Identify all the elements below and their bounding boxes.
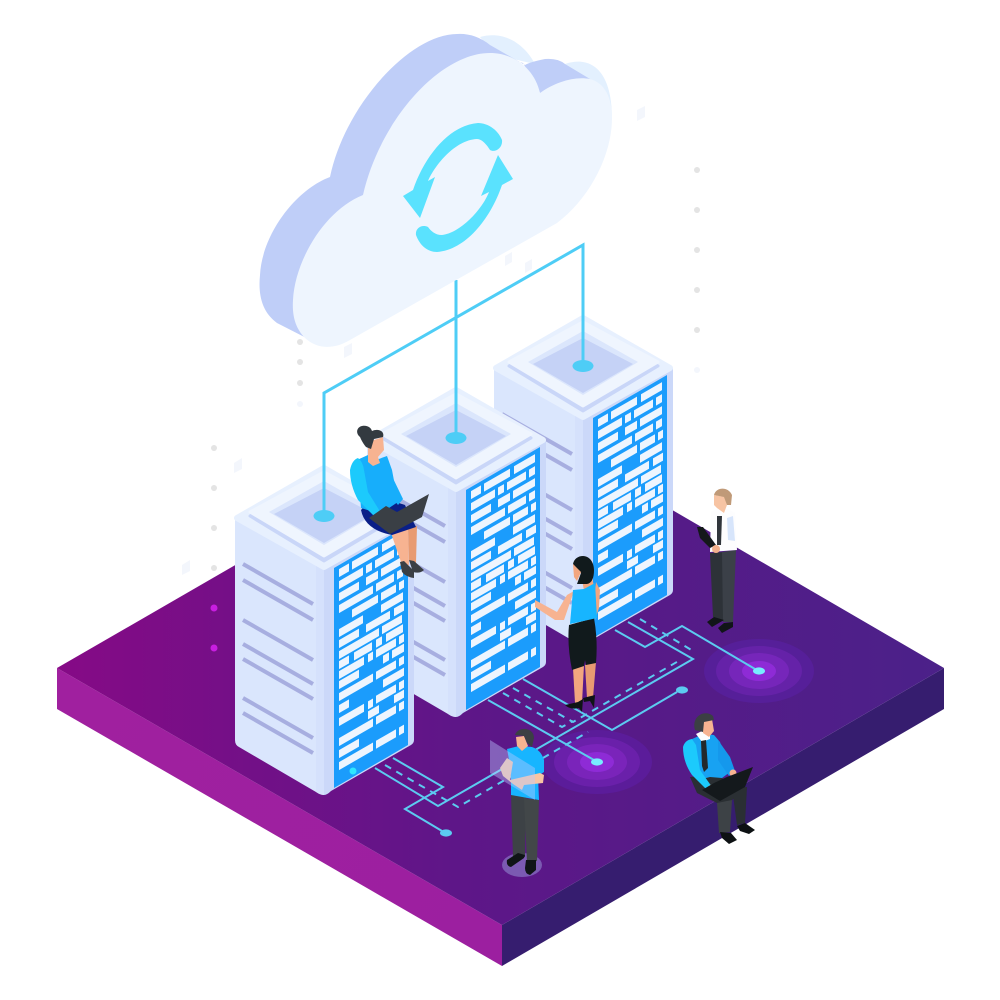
platform top [57, 411, 944, 925]
trousers [710, 552, 725, 622]
shoes [720, 823, 755, 844]
hair [573, 556, 594, 584]
hand [708, 784, 716, 794]
magenta dots [210, 604, 218, 652]
cloud front [293, 53, 612, 347]
face [703, 719, 714, 737]
cyan light on front rack [350, 768, 356, 774]
skirt [361, 498, 416, 535]
trousers [511, 795, 526, 857]
person: man sitting on edge with laptop [683, 713, 755, 844]
laptop [369, 494, 429, 534]
shoes [400, 560, 424, 578]
shoes [707, 617, 733, 633]
clipboard [697, 527, 716, 548]
torso [357, 455, 398, 514]
laptop [702, 767, 753, 801]
hair [694, 713, 714, 732]
platform right side [502, 668, 944, 966]
hair [714, 489, 732, 505]
shoes [565, 695, 595, 712]
hair [515, 729, 534, 747]
hand [376, 514, 388, 526]
circuit nodes [440, 667, 765, 837]
arms [500, 758, 544, 790]
hand [712, 545, 720, 553]
platform left side [57, 668, 502, 966]
glow ring: right [704, 639, 814, 703]
far arm [718, 740, 735, 776]
shirt [690, 734, 730, 780]
person: woman standing, pointing at server [535, 556, 600, 712]
sync arrow: top [403, 123, 502, 218]
glow ring: front [542, 730, 652, 794]
far arm [388, 468, 403, 505]
data links from cloud to servers [314, 245, 594, 522]
top [570, 583, 597, 624]
server rack: back [494, 318, 673, 645]
neck and face [368, 437, 384, 466]
circuit lines on platform [375, 619, 755, 831]
tie [701, 740, 708, 772]
near arm [683, 739, 712, 790]
holographic screen [490, 740, 535, 800]
hair [357, 426, 383, 449]
person: man with holographic tablet [490, 729, 544, 877]
face [714, 495, 727, 513]
near arm [350, 458, 381, 518]
tie [717, 516, 722, 545]
cloud [260, 34, 612, 347]
near leg [391, 527, 409, 565]
collar [696, 731, 710, 742]
decorative dots and specks [182, 106, 700, 575]
far leg [732, 787, 747, 825]
cloud pale back lobes [480, 35, 612, 118]
sync arrow: bottom [416, 155, 513, 252]
cloud side [260, 34, 600, 346]
person: woman sitting on server with laptop [350, 426, 429, 578]
platform [57, 411, 944, 966]
person: man with clipboard [697, 489, 737, 633]
shirt [507, 746, 544, 800]
shirt [710, 506, 737, 552]
face [573, 564, 581, 581]
server rack: front [235, 468, 414, 795]
server rack: middle [367, 390, 546, 717]
face [516, 736, 528, 751]
skirt [568, 618, 597, 670]
arm [535, 591, 574, 620]
far leg [408, 526, 417, 563]
near leg [717, 800, 732, 833]
base ellipse [502, 853, 542, 877]
neck [582, 578, 594, 590]
legs [573, 665, 584, 703]
shoes [507, 853, 536, 875]
thigh [690, 775, 745, 803]
